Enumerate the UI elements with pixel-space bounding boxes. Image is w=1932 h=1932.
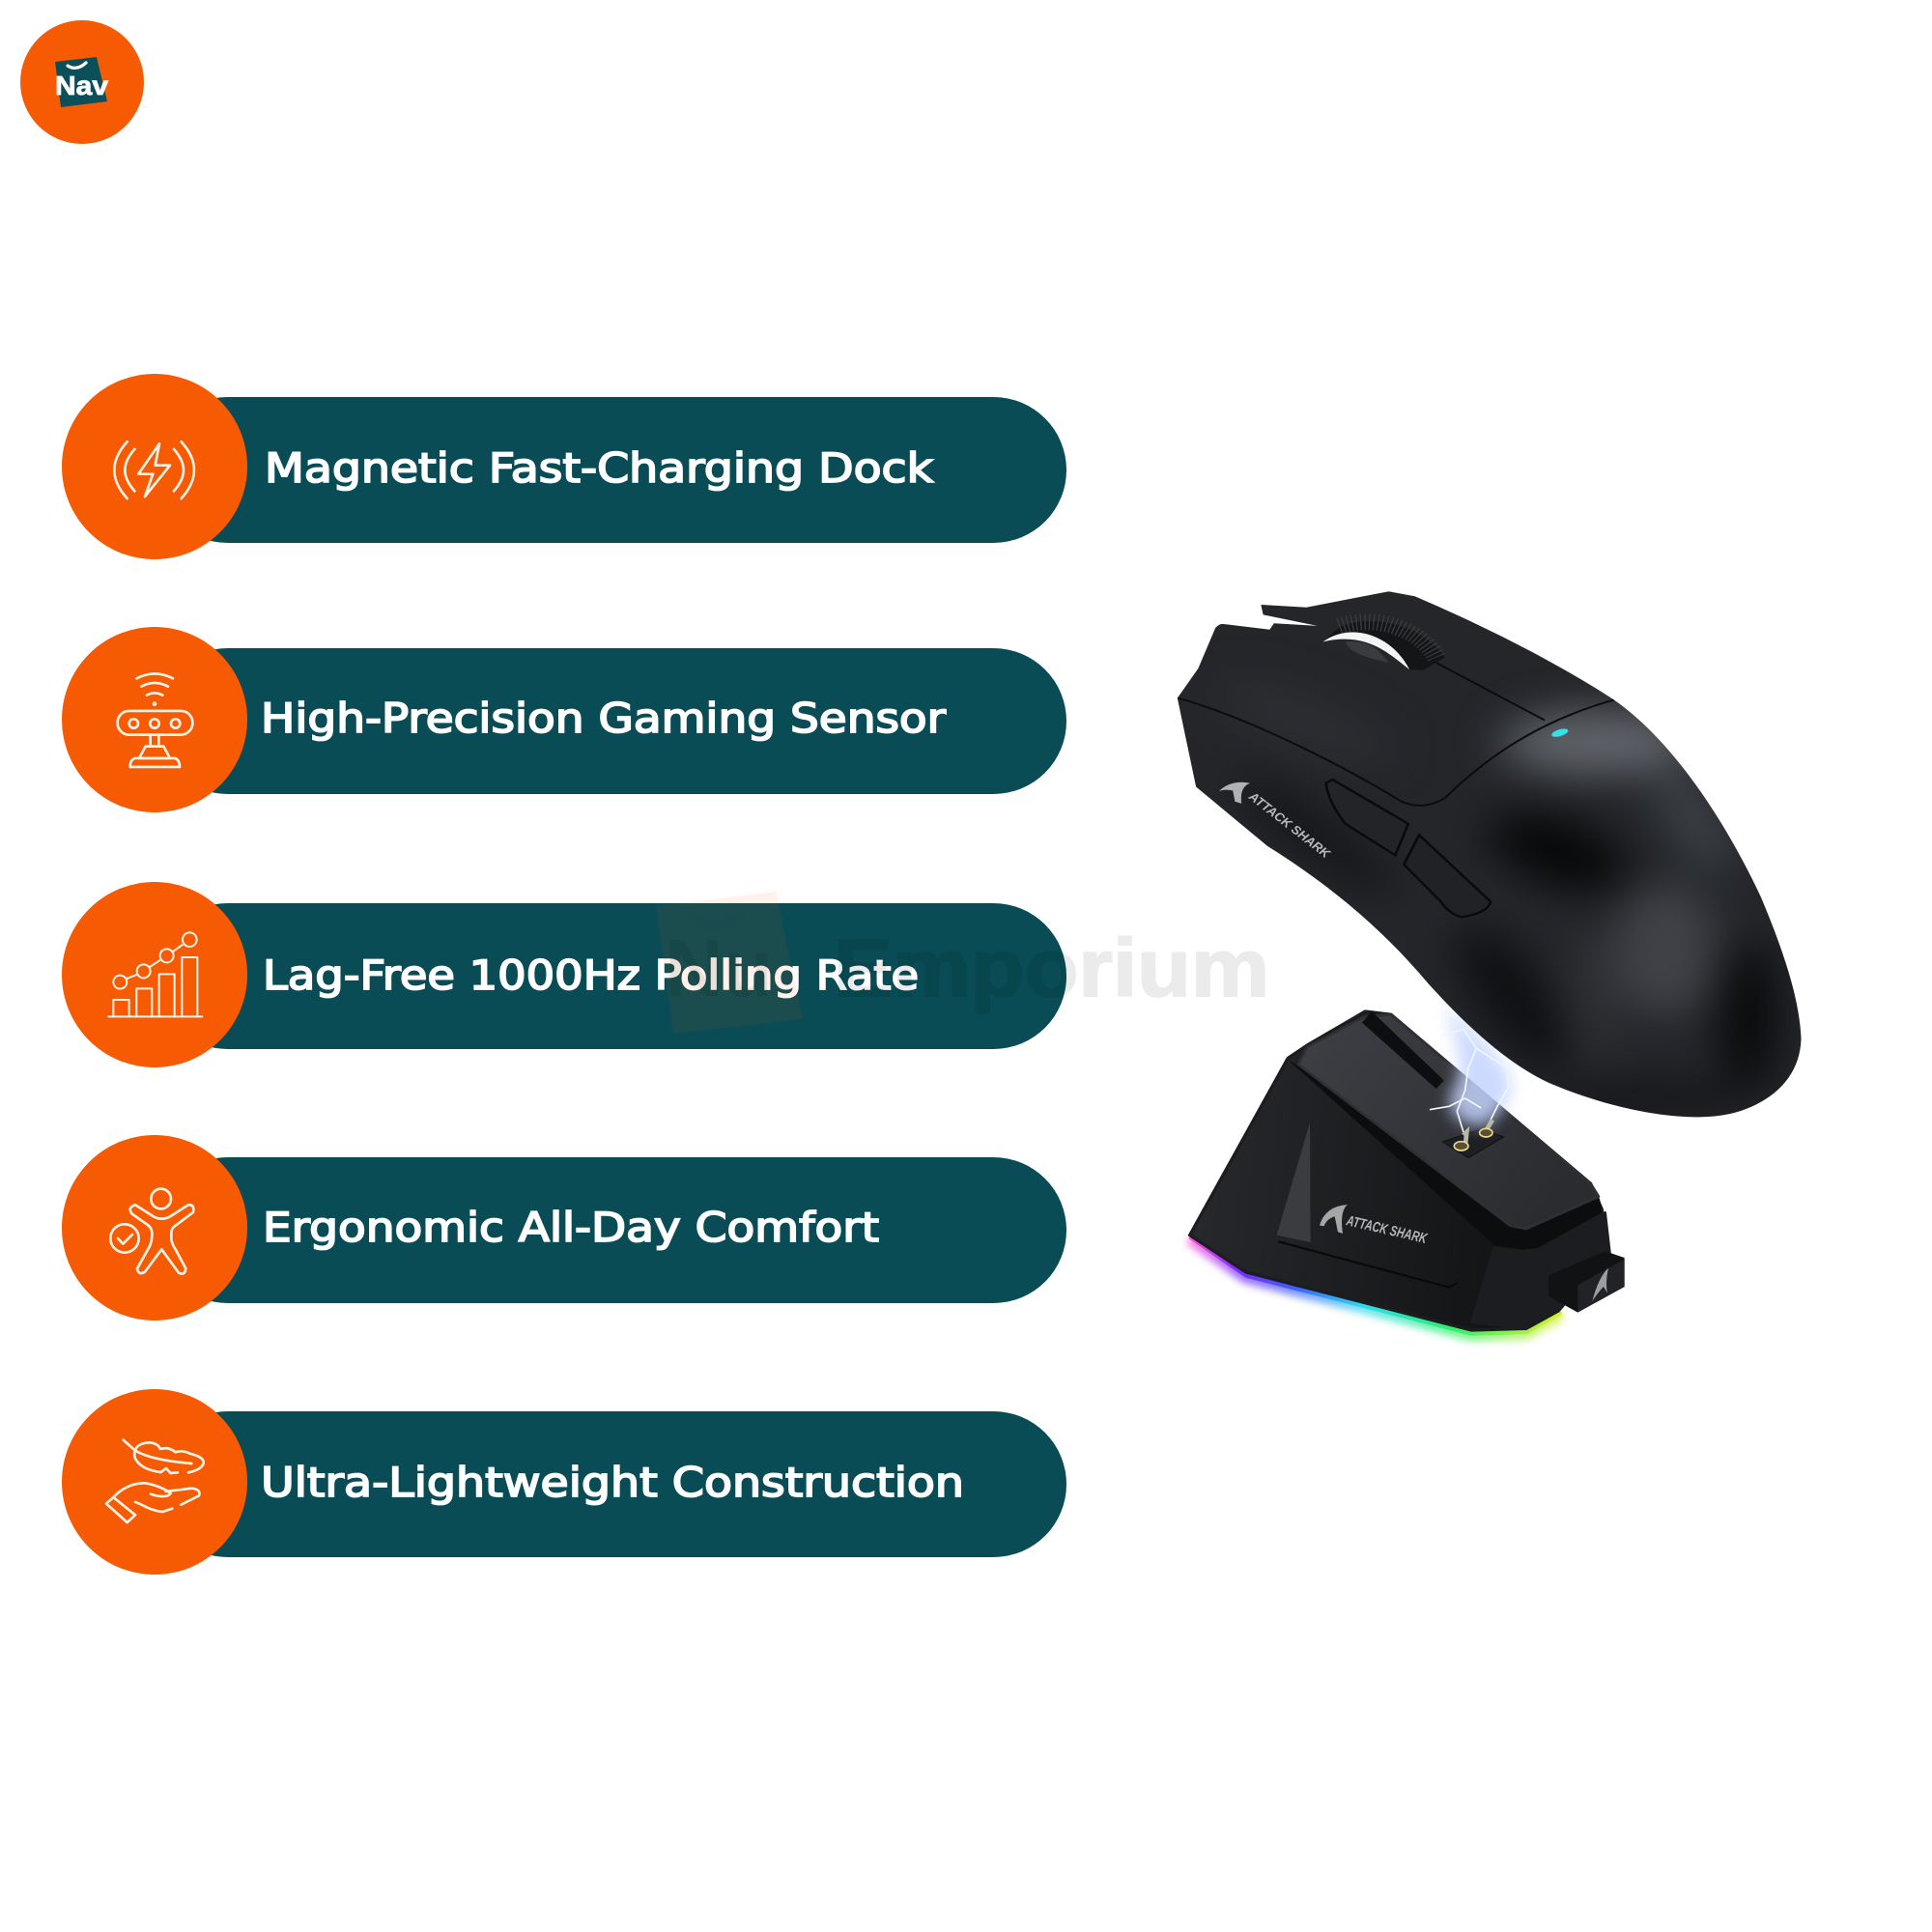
contact pad [1442, 1129, 1504, 1158]
dock slot [1362, 1011, 1444, 1089]
bar: magnetic dock [155, 397, 1066, 543]
dock front right facet [1471, 1212, 1610, 1328]
mouse body [1177, 591, 1801, 1117]
dock body [1190, 1011, 1605, 1330]
circle: polling rate [62, 882, 247, 1067]
side triangle [1277, 1122, 1311, 1242]
dock top plate [1298, 1014, 1599, 1229]
feature row: sensor [62, 627, 1066, 812]
icon: growth chart [108, 932, 202, 1016]
watermark Nu: Nu [665, 923, 773, 1013]
watermark: Nu Emporium [656, 892, 1269, 1034]
bar: polling rate [155, 903, 1066, 1049]
label: polling rate: Lag-Free 1000Hz Polling Rate [263, 952, 919, 999]
circle: lightweight [62, 1389, 247, 1575]
label: sensor: High-Precision Gaming Sensor [261, 695, 947, 742]
circle: sensor [62, 627, 247, 812]
usb dongle [1548, 1251, 1625, 1313]
bar: comfort [155, 1157, 1066, 1303]
circle: magnetic dock [62, 374, 247, 559]
watermark smile [692, 913, 744, 924]
lightning glow [1446, 1007, 1512, 1125]
bar: sensor [155, 648, 1066, 794]
side button front [1326, 780, 1408, 855]
recess line [1278, 1241, 1457, 1288]
icon: sensor with wifi [118, 673, 192, 767]
soft shading [1203, 663, 1775, 1113]
lightning bolts [1430, 1029, 1509, 1132]
product image: charging dock [1190, 1007, 1625, 1335]
mouse logo text: ATTACK SHARK [1245, 788, 1334, 862]
icon: person with check [110, 1189, 193, 1273]
icon: lightning with waves [114, 441, 194, 498]
logo: Nav badge: Nav [55, 71, 108, 100]
product image: mouse [1177, 591, 1801, 1117]
feature row: magnetic dock [62, 374, 1066, 559]
dock black band [1288, 1060, 1602, 1250]
status led [1551, 728, 1569, 737]
logo: Nav badge [20, 20, 144, 144]
feature row: lightweight [62, 1389, 1066, 1575]
circle: comfort [62, 1135, 247, 1321]
scroll wheel [1322, 621, 1445, 670]
charging pins [1454, 1120, 1492, 1151]
dock logo text: ATTACK SHARK [1344, 1212, 1430, 1247]
watermark logo tile [656, 892, 803, 1034]
label: comfort: Ergonomic All-Day Comfort [263, 1204, 879, 1251]
label: lightweight: Ultra-Lightweight Construction [261, 1459, 964, 1506]
bar: lightweight [155, 1411, 1066, 1557]
label: magnetic dock: Magnetic Fast-Charging Dock [265, 444, 934, 492]
icon: feather over hand [106, 1440, 204, 1522]
body seams [1178, 663, 1614, 806]
mouse logo fin [1219, 782, 1250, 804]
rgb glow [1190, 1237, 1562, 1335]
feature row: polling rate [62, 882, 1066, 1067]
feature row: comfort [62, 1135, 1066, 1321]
dock logo fin [1320, 1205, 1348, 1234]
side button rear [1404, 835, 1491, 917]
watermark Emporium: Emporium [834, 923, 1269, 1013]
